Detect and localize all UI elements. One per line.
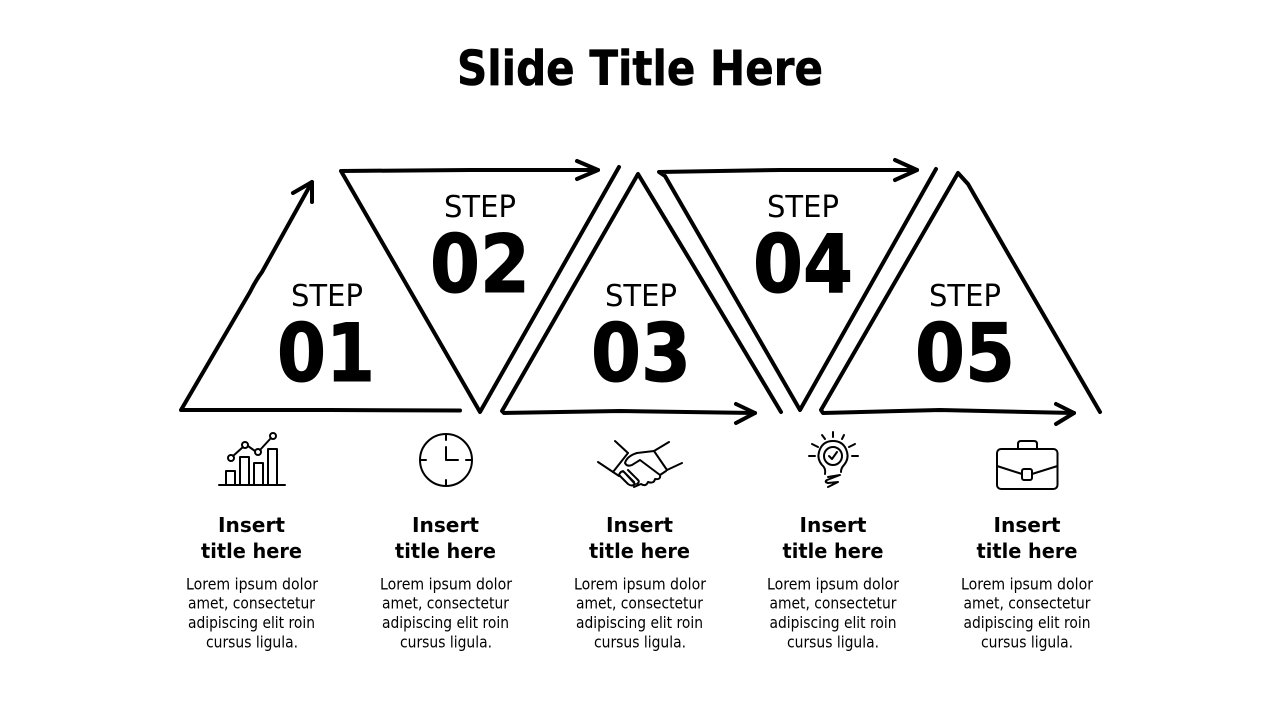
triangle step 04: STEP	[767, 190, 839, 225]
column 4 text: cursus ligula.	[787, 632, 879, 652]
column 4 text: amet, consectetur	[770, 594, 897, 612]
icon: light bulb	[809, 432, 858, 487]
icon: clock	[420, 434, 472, 486]
icon: briefcase	[997, 441, 1058, 489]
triangle step 01: 01	[277, 307, 375, 400]
column 2 text: cursus ligula.	[400, 632, 492, 652]
column 4 text: title here	[782, 539, 884, 563]
triangle step 02	[341, 161, 619, 412]
column 5 text: cursus ligula.	[981, 632, 1073, 652]
column 5 text: title here	[976, 539, 1078, 563]
column 2 text: adipiscing elit roin	[382, 613, 509, 632]
column 1 text: amet, consectetur	[188, 594, 315, 612]
column 2 text: Insert	[412, 513, 479, 537]
column 1 text: Insert	[218, 513, 285, 537]
column 2 text: title here	[395, 539, 496, 563]
column 1 text: cursus ligula.	[206, 632, 298, 652]
triangle step 05	[821, 173, 1100, 424]
column 4 text: Lorem ipsum dolor	[767, 574, 899, 594]
column 2 text: amet, consectetur	[382, 594, 509, 612]
triangle step 03: STEP	[605, 279, 677, 314]
column 4 text: adipiscing elit roin	[770, 613, 896, 632]
triangle step 01: STEP	[291, 279, 363, 314]
column 5 text: Insert	[994, 513, 1061, 537]
column 3 text	[574, 513, 706, 652]
triangle step 02: STEP	[444, 190, 516, 225]
column 3 text: Insert	[606, 513, 673, 537]
column 4 text	[767, 513, 899, 652]
column 3 text: cursus ligula.	[594, 632, 686, 652]
column 1 text: adipiscing elit roin	[188, 613, 315, 632]
column 3 text: title here	[589, 539, 690, 563]
icon: handshake	[598, 441, 682, 487]
column 5 text: amet, consectetur	[964, 594, 1091, 612]
column 2 text	[380, 513, 512, 652]
triangle step 05: 05	[915, 307, 1015, 400]
column 1 text	[186, 513, 318, 652]
title: Slide Title Here	[457, 41, 823, 97]
triangle step 02: 02	[430, 218, 530, 311]
column 5 text	[961, 513, 1093, 652]
column 4 text: Insert	[800, 513, 867, 537]
triangle step 03	[502, 174, 781, 423]
column 5 text: Lorem ipsum dolor	[961, 574, 1093, 594]
triangle step 03: 03	[591, 307, 691, 400]
column 1 text: Lorem ipsum dolor	[186, 574, 318, 594]
icon: bar chart	[219, 433, 285, 485]
column 5 text: adipiscing elit roin	[964, 613, 1090, 632]
column 3 text: amet, consectetur	[576, 594, 703, 612]
triangle step 01	[181, 182, 460, 410]
column 1 text: title here	[201, 539, 302, 563]
column 3 text: adipiscing elit roin	[576, 613, 703, 632]
column 2 text: Lorem ipsum dolor	[380, 574, 512, 594]
column 3 text: Lorem ipsum dolor	[574, 574, 706, 594]
triangle step 05: STEP	[929, 279, 1001, 314]
triangle step 04: 04	[753, 218, 853, 311]
triangle step 04	[659, 160, 936, 410]
